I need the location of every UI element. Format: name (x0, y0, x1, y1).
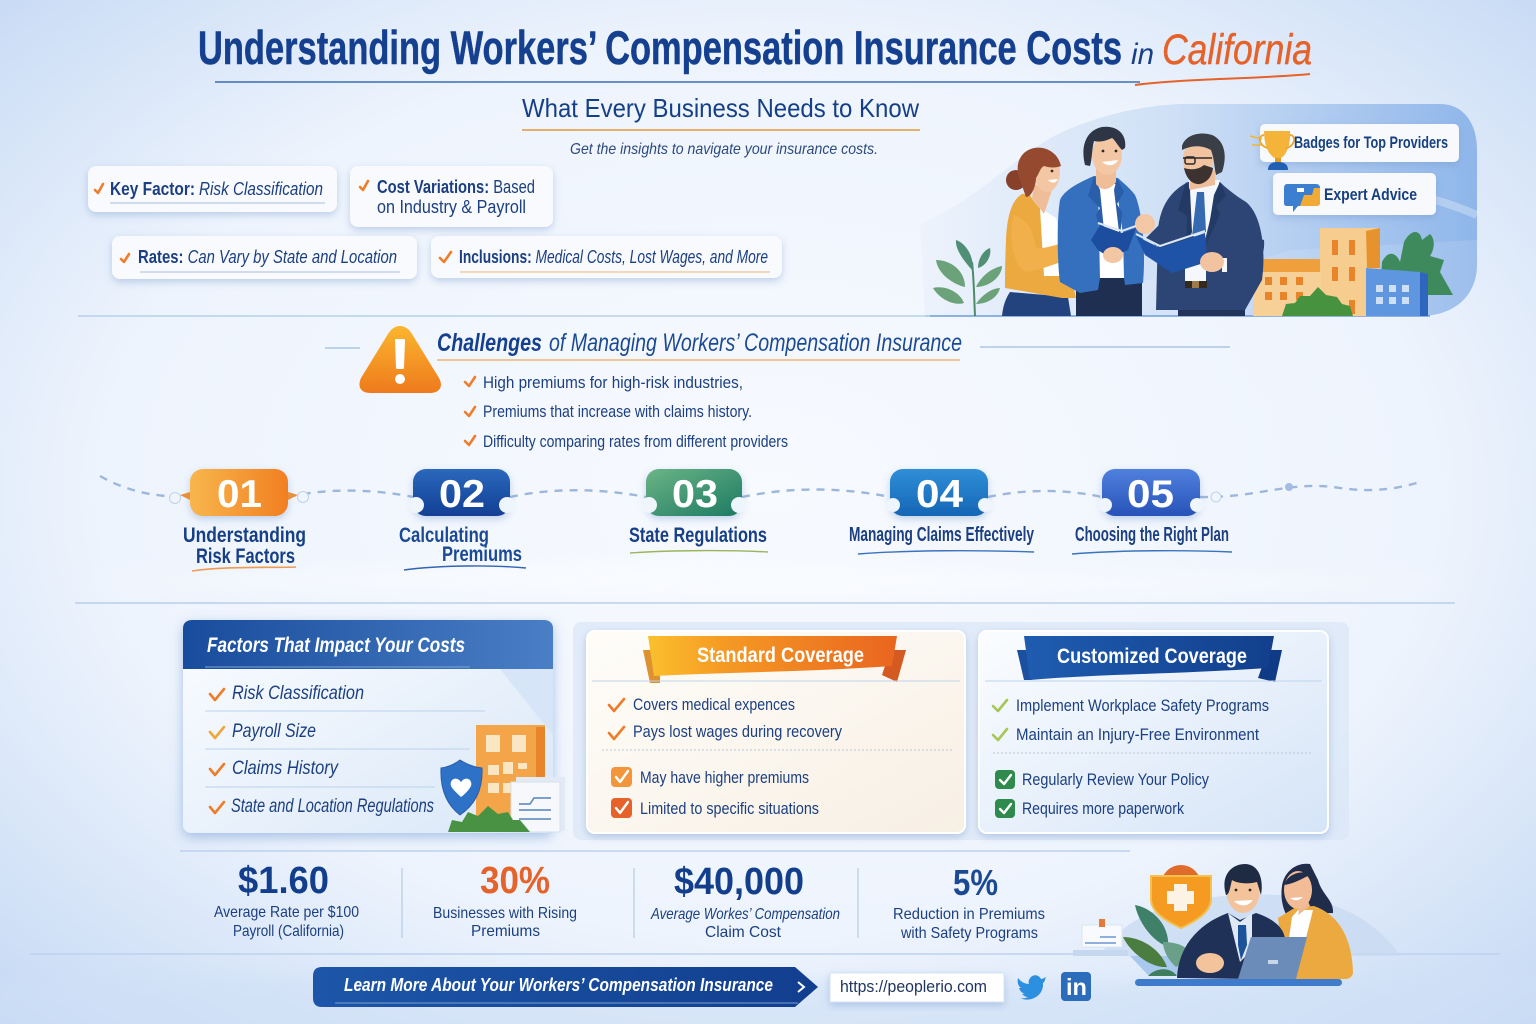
key fact: key factor: Key Factor: (110, 179, 195, 199)
stat: average rate (214, 860, 359, 940)
step 02: Calculating (399, 524, 489, 547)
icon: plant left (933, 240, 1002, 316)
badge: expert advice: Expert Advice (1324, 185, 1417, 204)
step 05 (1072, 469, 1293, 554)
customized actions: Regularly Review Your Policy (1022, 770, 1209, 789)
laptop (1238, 937, 1307, 979)
stat: safety reduction: Reduction in Premiums (893, 906, 1045, 923)
step 03 (629, 469, 768, 553)
stat: rising premiums (433, 860, 577, 940)
step 04: Managing Claims Effectively (849, 524, 1035, 546)
stat: safety reduction: 5% (953, 862, 998, 903)
person: man in blue blazer (1058, 127, 1144, 316)
factors list: Claims History (232, 758, 339, 779)
url box: https://peoplerio.com (840, 977, 987, 996)
factors list: Risk Classification (232, 683, 364, 704)
call to action banner (313, 967, 818, 1007)
challenges heading (325, 329, 1230, 360)
step 04 (849, 469, 1035, 554)
title: Understanding Workers’ Compensation Insurance Costs (198, 21, 1122, 74)
key fact: rates (112, 236, 417, 279)
coverage backdrop (573, 622, 1349, 840)
customized benefits: Maintain an Injury-Free Environment (1016, 725, 1259, 744)
badge: top providers: Badges for Top Providers (1294, 133, 1448, 152)
man (1177, 864, 1285, 979)
stat: average claim cost: Average Workes’ Compensation (650, 906, 840, 923)
icon: linkedin: in (1066, 974, 1087, 1000)
step 02 (399, 469, 526, 570)
challenges list: Difficulty comparing rates from different providers (483, 432, 788, 451)
step 05: Choosing the Right Plan (1075, 524, 1229, 546)
panel: standard coverage (587, 631, 965, 833)
factors list: Payroll Size (232, 721, 316, 742)
badge: expert advice (1273, 173, 1436, 215)
step 03: State Regulations (629, 524, 767, 547)
desk (1135, 979, 1342, 986)
stat: average rate: Average Rate per $100 (214, 904, 359, 921)
person: woman in orange jacket (1002, 148, 1096, 316)
step 02: Premiums (442, 543, 522, 566)
stat: average claim cost (650, 861, 840, 941)
panel: standard coverage: Standard Coverage (697, 644, 864, 667)
plant leaves (1123, 905, 1187, 976)
factors list: State and Location Regulations (231, 796, 434, 817)
stat: average claim cost: $40,000 (674, 861, 804, 903)
woman (1278, 864, 1353, 979)
customized benefits (993, 696, 1269, 744)
panel: factors that impact your costs: Factors That Impact Your Costs (207, 634, 465, 657)
challenges heading: Challenges (437, 329, 542, 357)
customized actions: Requires more paperwork (1022, 799, 1184, 818)
standard benefits: Pays lost wages during recovery (633, 722, 842, 741)
icon: warning triangle (359, 326, 441, 393)
stat: safety reduction (893, 862, 1045, 942)
title: California (1162, 26, 1312, 74)
step 01: Understanding (183, 524, 306, 547)
step 02: 02 (439, 473, 485, 516)
customized actions (995, 770, 1209, 818)
step 03: 03 (672, 473, 718, 516)
badge: top providers (1250, 124, 1459, 170)
stat: average rate: $1.60 (238, 860, 329, 902)
person: bearded man in navy suit (1135, 133, 1263, 316)
buildings (1253, 228, 1453, 316)
stat: rising premiums: 30% (480, 860, 550, 902)
standard drawbacks (611, 767, 819, 818)
key fact: inclusions: Inclusions: Medical Costs, Lost Wages, and More (459, 247, 768, 267)
challenges list (465, 373, 788, 451)
timeline dashed path (100, 476, 1420, 497)
document box (1073, 919, 1128, 956)
icon: linkedin (1061, 972, 1091, 1001)
stat: safety reduction: with Safety Programs (900, 925, 1038, 942)
stat: rising premiums: Premiums (471, 923, 540, 940)
factors list (205, 683, 485, 817)
icon: twitter (1018, 975, 1046, 1000)
standard benefits (609, 695, 842, 741)
standard drawbacks: Limited to specific situations (640, 799, 819, 818)
key fact: cost variations (350, 166, 553, 227)
step 01: Risk Factors (196, 545, 295, 568)
step 05: 05 (1127, 473, 1174, 516)
standard benefits: Covers medical expences (633, 695, 795, 714)
illustration: advisors with laptop (1073, 864, 1400, 986)
key fact: cost variations: on Industry & Payroll (377, 197, 526, 217)
panel: customized coverage: Customized Coverage (1057, 645, 1247, 668)
customized benefits: Implement Workplace Safety Programs (1016, 696, 1269, 715)
factors illustration (441, 725, 565, 832)
key fact: key factor: Risk Classification (199, 179, 323, 199)
panel: customized coverage (979, 631, 1328, 833)
standard drawbacks: May have higher premiums (640, 768, 809, 787)
title: in (1131, 38, 1154, 71)
step 01 (170, 469, 308, 571)
url box (830, 973, 1004, 1002)
challenges heading: of Managing Workers’ Compensation Insurance (549, 329, 962, 357)
key fact: inclusions (431, 236, 782, 278)
hero illustration panel (920, 104, 1477, 316)
panel: factors that impact your costs (183, 620, 565, 833)
subtitle: What Every Business Needs to Know (522, 93, 919, 123)
step 04: 04 (916, 473, 963, 516)
key fact: rates: Rates: Can Vary by State and Location (138, 247, 397, 267)
key fact: cost variations: Cost Variations: Based (377, 177, 535, 197)
challenges list: Premiums that increase with claims history. (483, 402, 752, 421)
stat: average rate: Payroll (California) (233, 923, 344, 940)
stat: average claim cost: Claim Cost (705, 924, 782, 941)
stat: rising premiums: Businesses with Rising (433, 905, 577, 922)
step 01: 01 (217, 473, 262, 516)
tagline: Get the insights to navigate your insurance costs. (570, 141, 878, 158)
icon: shield with cross (1151, 865, 1211, 928)
challenges list: High premiums for high-risk industries, (483, 373, 743, 392)
key fact: key factor (88, 166, 337, 212)
open blue books (1091, 223, 1264, 275)
call to action banner: Learn More About Your Workers’ Compensation Insurance (344, 975, 773, 995)
